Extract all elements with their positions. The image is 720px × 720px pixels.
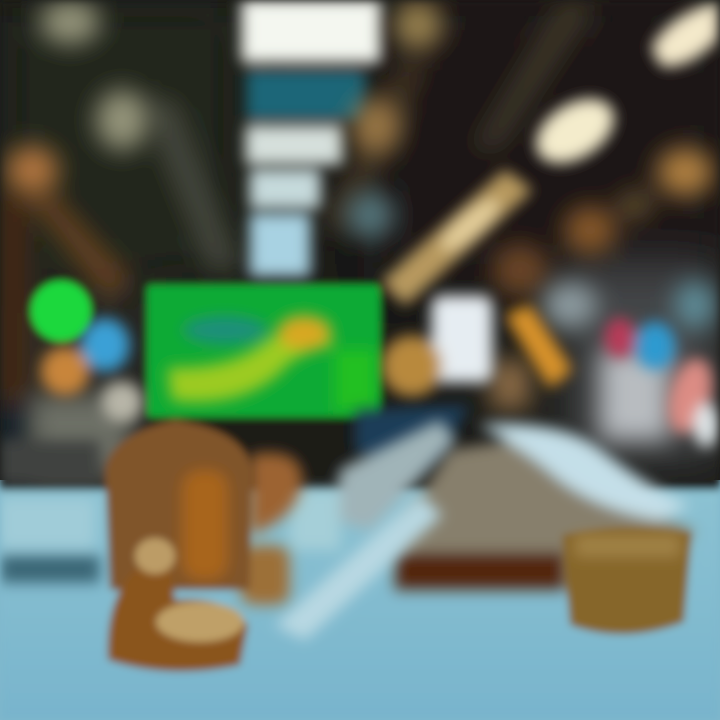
market stalls: coloured signs on the right: [382, 281, 719, 447]
table surface: [0, 440, 720, 720]
brown pitcher: [105, 420, 302, 605]
bread loaf: [108, 538, 248, 671]
green price sign: [147, 285, 380, 417]
background: hall ceiling and pillars: [0, 0, 720, 480]
grey cloth mound: [355, 405, 695, 590]
skylight column: [242, 0, 380, 276]
cup on the right: [562, 527, 692, 634]
icon: green circle sign: [31, 281, 91, 341]
ceiling lights: [6, 0, 718, 305]
market stalls: coloured signs on the left: [30, 281, 142, 475]
glass on the table: [275, 420, 455, 640]
